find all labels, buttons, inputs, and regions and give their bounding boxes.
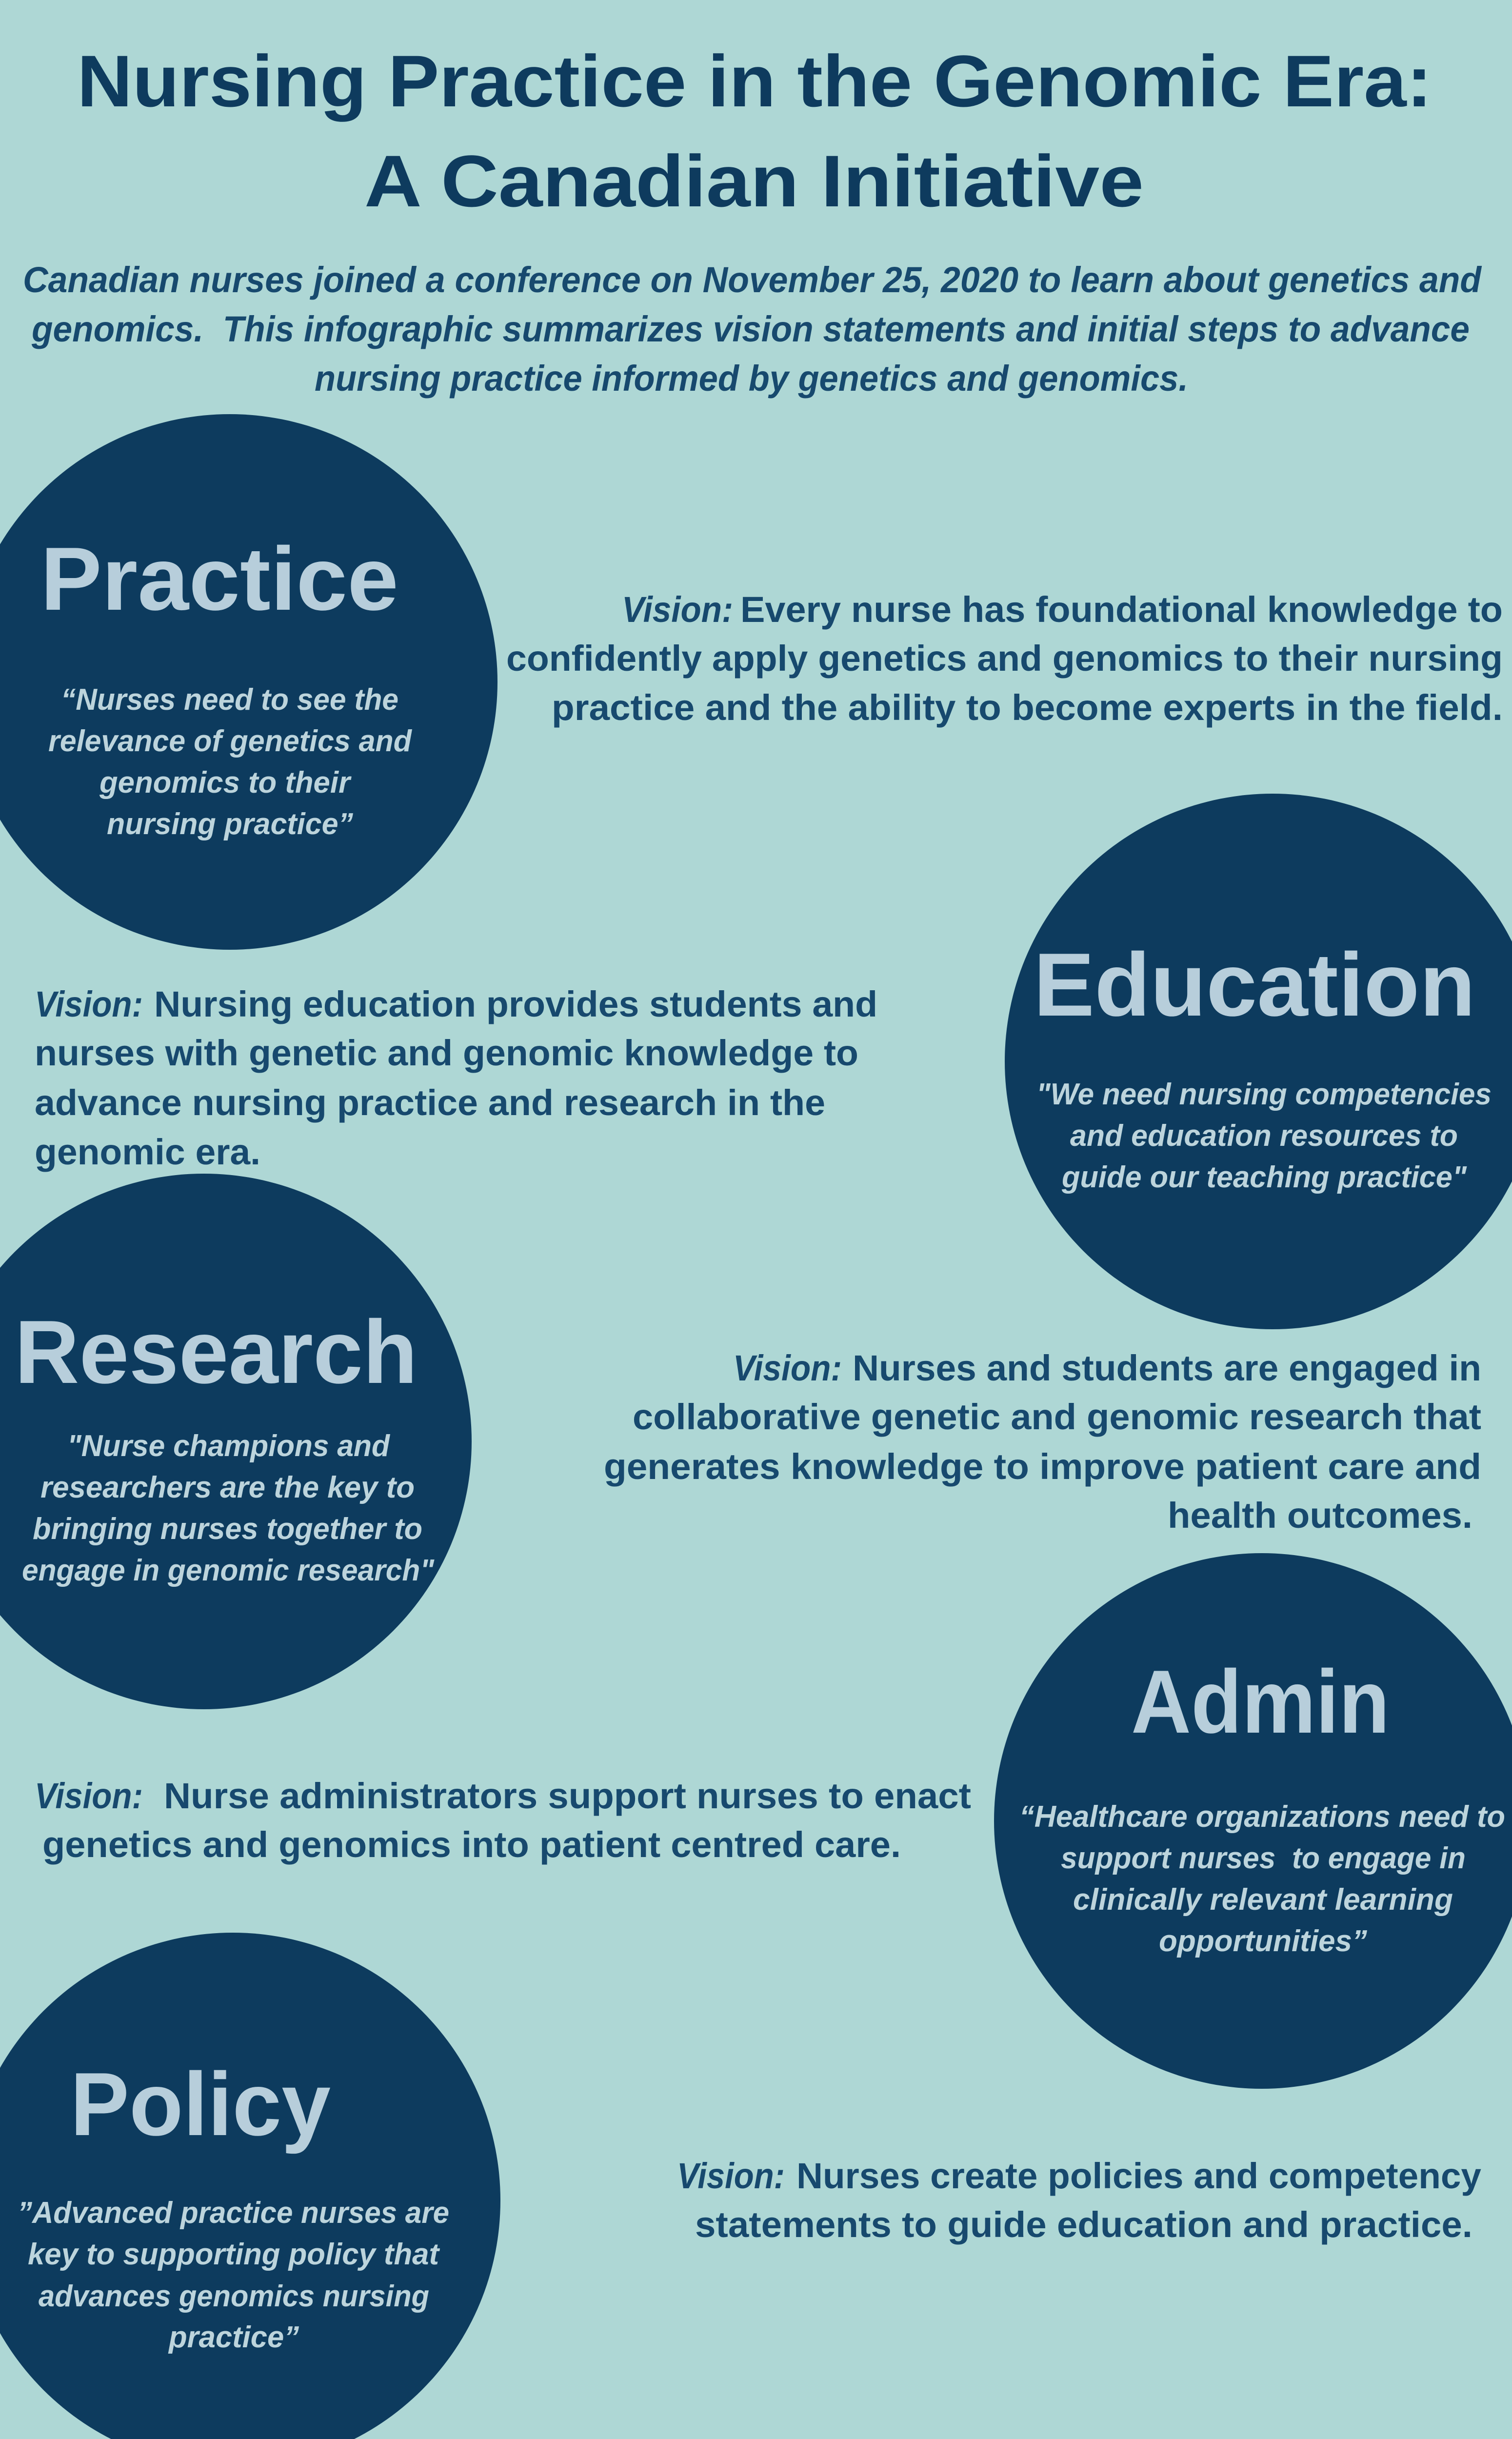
vision: education: Nursing education provides students and [154, 984, 877, 1024]
quote: education: guide our teaching practice" [1061, 1160, 1468, 1194]
quote: policy: ”Advanced practice nurses are [18, 2196, 449, 2230]
vision: research: health outcomes. [1168, 1495, 1472, 1536]
heading: Policy: Policy [70, 2054, 331, 2154]
panel: education circle [1005, 794, 1512, 1329]
panel: research circle [0, 1174, 472, 1709]
quote: admin: support nurses to engage in [1061, 1841, 1466, 1875]
vision: education: nurses with genetic and genomic knowledge to [35, 1033, 858, 1073]
quote: practice [48, 683, 412, 841]
quote: education: "We need nursing competencies [1036, 1078, 1492, 1111]
vision: research: Vision: [733, 1348, 842, 1388]
quote: education: and education resources to [1070, 1119, 1458, 1153]
title: Nursing Practice in the Genomic Era: [77, 40, 1432, 122]
quote: practice: genomics to their [99, 766, 352, 800]
vision: admin: Vision: [35, 1776, 143, 1816]
vision: practice: confidently apply genetics and genomics to their nursing [506, 638, 1503, 679]
quote: research: researchers are the key to [40, 1471, 415, 1504]
vision: policy [677, 2156, 1481, 2245]
vision: research: Nurses and students are engaged in [853, 1348, 1481, 1388]
intro text: nursing practice informed by genetics and genomics. [315, 358, 1188, 399]
heading: Practice: Practice [40, 528, 398, 629]
vision: practice: Every nurse has foundational knowledge to [740, 589, 1503, 630]
vision: education [35, 984, 877, 1172]
quote: admin: opportunities” [1159, 1924, 1367, 1958]
intro text: Canadian nurses joined a conference on November 25, 2020 to learn about genetics and [23, 260, 1482, 300]
quote: research: engage in genomic research" [22, 1554, 435, 1587]
vision: education: genomic era. [35, 1132, 260, 1172]
quote: practice: relevance of genetics and [48, 724, 412, 758]
quote: research [22, 1429, 435, 1587]
quote: policy: advances genomics nursing [39, 2279, 429, 2313]
vision: research [604, 1348, 1481, 1536]
vision: education: advance nursing practice and research in the [35, 1082, 825, 1123]
heading: Admin: Admin [1131, 1651, 1390, 1752]
intro text [23, 260, 1482, 399]
quote: research: "Nurse champions and [67, 1429, 390, 1463]
quote: practice: nursing practice” [107, 807, 353, 841]
vision: admin: genetics and genomics into patient centred care. [42, 1824, 901, 1865]
vision: practice [506, 589, 1503, 728]
quote: policy [18, 2196, 449, 2354]
title: A Canadian Initiative [364, 140, 1144, 222]
vision: education: Vision: [35, 984, 143, 1024]
vision: policy: statements to guide education and practice. [695, 2204, 1472, 2245]
vision: admin [35, 1776, 971, 1865]
quote: research: bringing nurses together to [33, 1512, 422, 1546]
panel: admin circle [994, 1553, 1512, 2089]
intro text: genomics. This infographic summarizes vision statements and initial steps to advance [31, 309, 1470, 349]
panel: policy circle [0, 1933, 500, 2439]
title [77, 40, 1432, 222]
vision: practice: practice and the ability to become experts in the field. [552, 687, 1503, 728]
panel: practice circle [0, 414, 497, 950]
vision: practice: Vision: [622, 589, 733, 630]
vision: policy: Nurses create policies and competency [796, 2156, 1481, 2196]
quote: admin: clinically relevant learning [1073, 1883, 1453, 1917]
quote: policy: key to supporting policy that [28, 2238, 440, 2271]
vision: research: collaborative genetic and genomic research that [633, 1397, 1481, 1437]
heading: Education: Education [1034, 934, 1475, 1035]
quote: admin [1019, 1800, 1505, 1958]
quote: education [1036, 1078, 1492, 1194]
vision: admin: Nurse administrators support nurses to enact [164, 1776, 971, 1816]
quote: practice: “Nurses need to see the [61, 683, 398, 717]
quote: admin: “Healthcare organizations need to [1019, 1800, 1505, 1834]
vision: research: generates knowledge to improve patient care and [604, 1446, 1481, 1487]
quote: policy: practice” [168, 2320, 299, 2354]
vision: policy: Vision: [677, 2156, 785, 2196]
heading: Research: Research [15, 1301, 418, 1402]
